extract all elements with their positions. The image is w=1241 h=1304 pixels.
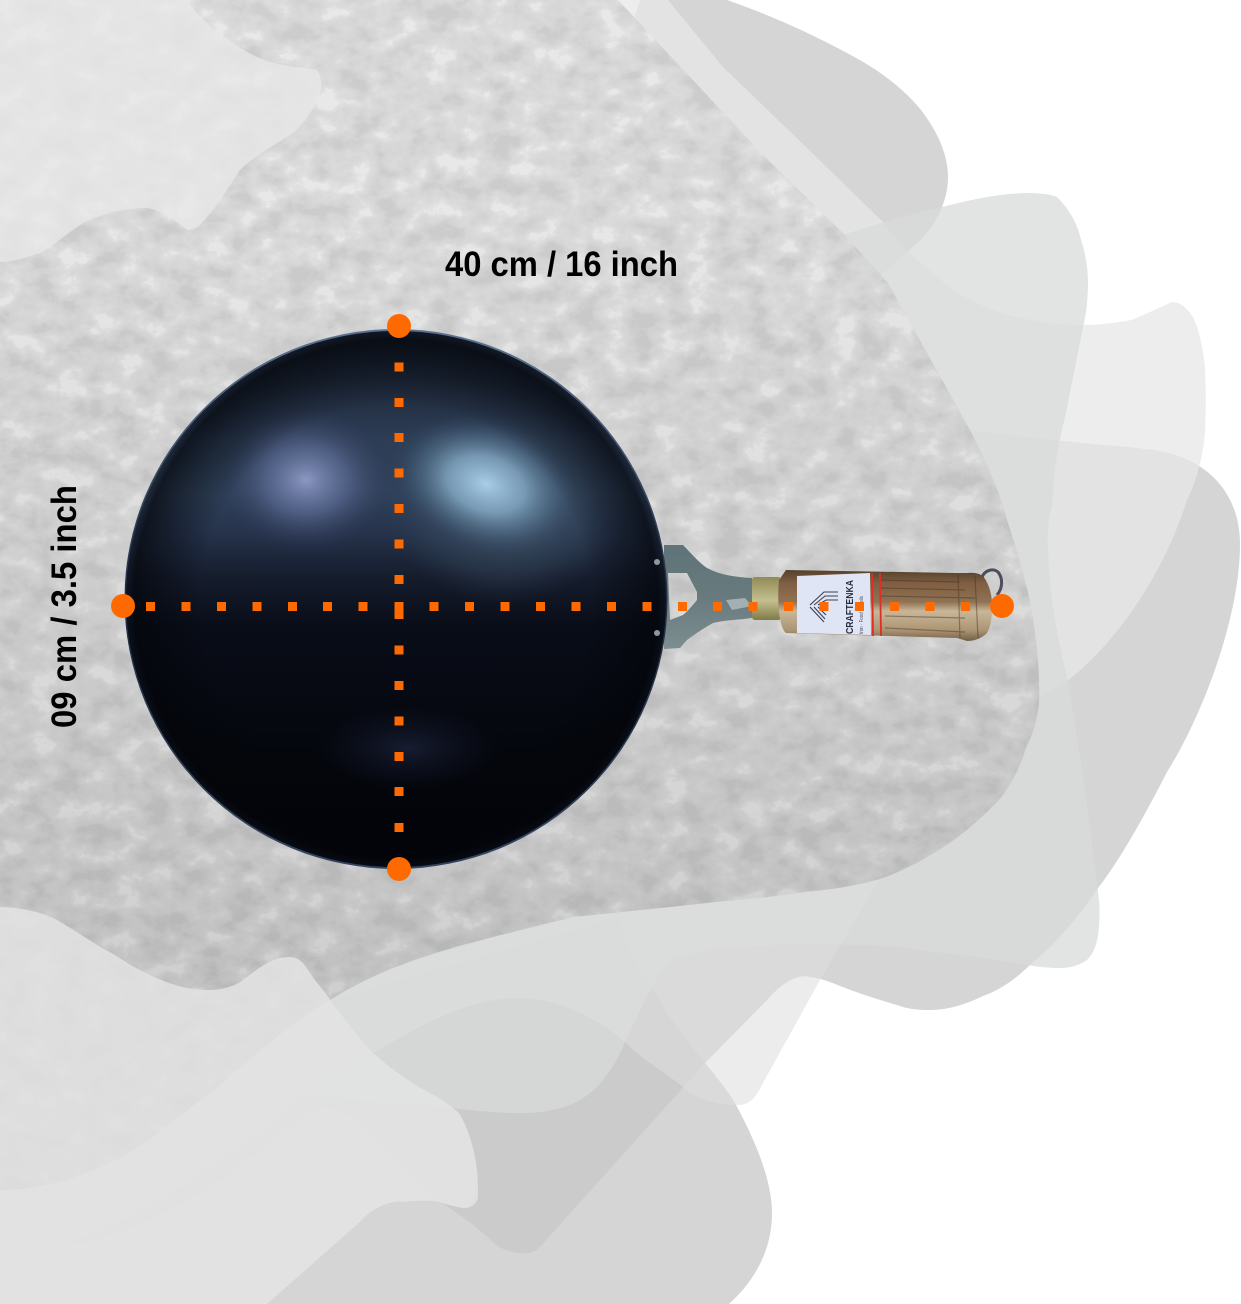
wooden handle — [778, 570, 992, 641]
wave: lower left base — [0, 1100, 500, 1304]
endpoint: left — [111, 594, 135, 618]
wave: top left translucent — [0, 0, 321, 262]
wok edge shading — [126, 331, 666, 867]
handle paper label — [797, 573, 871, 635]
hanging ring — [982, 570, 1002, 595]
pan handle bracket — [664, 545, 752, 649]
wood grain — [880, 574, 978, 638]
handle red stripes — [872, 573, 881, 636]
wok highlight right — [370, 388, 602, 580]
brass collar — [752, 577, 781, 620]
logo chevrons — [810, 592, 838, 622]
wok rim — [124, 329, 668, 869]
label: diameter: 40 cm / 16 inch — [445, 245, 678, 284]
wok body — [126, 331, 666, 867]
logo brand text: CRAFTENKA — [844, 580, 856, 634]
wave: large dark backdrop — [0, 430, 1240, 1263]
wave: long sweep — [0, 878, 880, 1262]
bracket shine — [726, 598, 752, 610]
rivet lower — [654, 630, 660, 636]
wave: dome overlap dark — [444, 1042, 683, 1253]
rivet upper — [654, 559, 660, 565]
label: depth: 09 cm / 3.5 inch — [45, 485, 84, 728]
endpoint: right — [990, 594, 1014, 618]
wave: top band and far right — [600, 0, 1206, 697]
icon: wok pan with handle — [124, 329, 1002, 869]
wave: lower left translucent — [0, 907, 478, 1263]
wave: top right dark — [620, 0, 948, 278]
wok shoulder glow — [385, 405, 625, 605]
endpoint: top — [387, 314, 411, 338]
background: concrete texture — [0, 0, 1040, 1000]
wok highlight left — [214, 404, 398, 556]
wave: right tall — [304, 193, 1100, 1113]
dotted measure: width — [146, 602, 970, 611]
wave: bottom dome — [267, 917, 772, 1304]
logo tagline: Iron · Food utensils — [859, 596, 865, 634]
wok lower reflection — [318, 706, 498, 790]
dotted measure: height — [394, 362, 404, 832]
endpoint: bottom — [387, 857, 411, 881]
